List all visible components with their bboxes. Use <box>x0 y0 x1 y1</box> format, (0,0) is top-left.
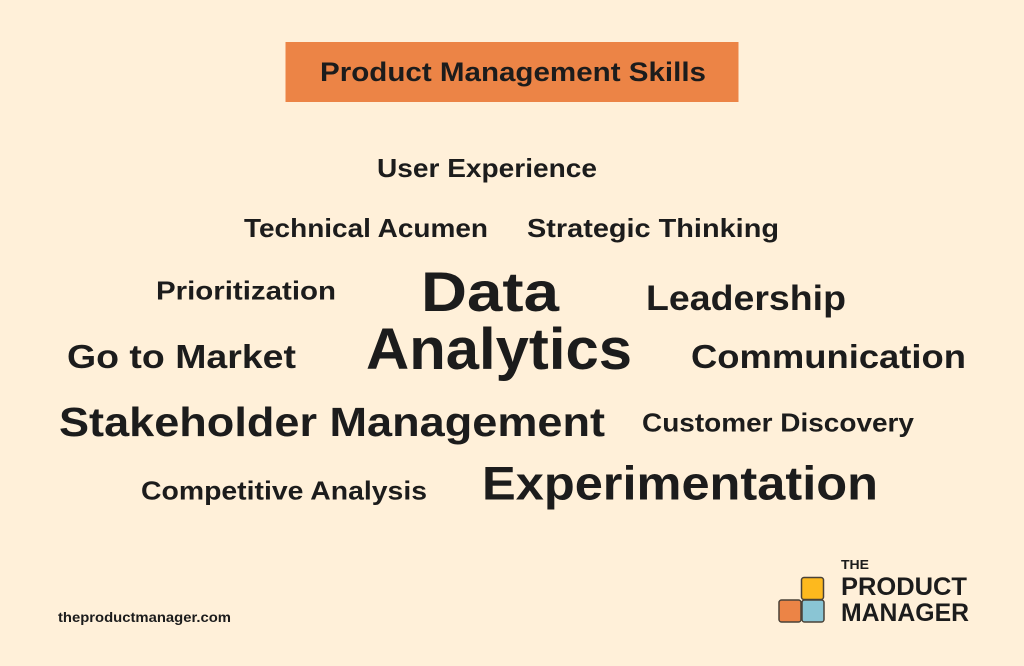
logo wordmark: PRODUCT <box>841 573 967 601</box>
skill: Prioritization: Prioritization <box>156 276 336 306</box>
logo <box>779 558 969 627</box>
skill: Data: Data <box>421 260 560 323</box>
skill: Strategic Thinking: Strategic Thinking <box>527 213 779 243</box>
skill: Leadership: Leadership <box>646 279 846 318</box>
skill: Go to Market: Go to Market <box>67 338 296 375</box>
logo wordmark: MANAGER <box>841 599 969 627</box>
footer url: theproductmanager.com <box>58 609 231 625</box>
skill: Communication: Communication <box>691 338 966 375</box>
title banner: Product Management Skills <box>320 57 706 87</box>
logo wordmark <box>841 558 969 627</box>
logo wordmark: THE <box>841 558 869 572</box>
icon: blocks <box>779 578 824 622</box>
skill: User Experience: User Experience <box>377 153 597 183</box>
skill: Competitive Analysis: Competitive Analysis <box>141 476 427 506</box>
skill: Analytics: Analytics <box>366 317 632 382</box>
skill: Technical Acumen: Technical Acumen <box>244 213 488 243</box>
skill: Experimentation: Experimentation <box>482 456 878 510</box>
skill: Customer Discovery: Customer Discovery <box>642 408 915 438</box>
title banner <box>286 42 738 102</box>
skill: Stakeholder Management: Stakeholder Management <box>59 399 605 445</box>
word cloud <box>59 153 966 510</box>
